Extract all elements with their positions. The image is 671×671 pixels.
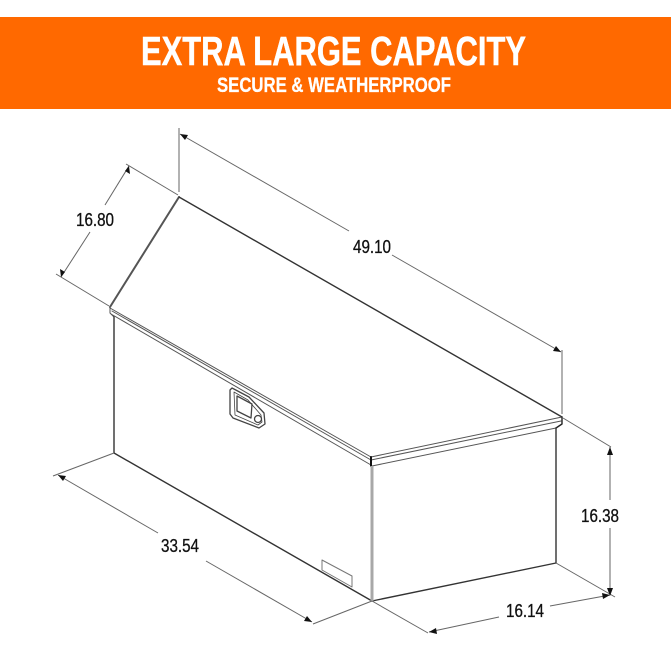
header banner xyxy=(0,17,671,109)
label: 16.38 xyxy=(581,505,619,526)
dimension: 16.38 xyxy=(556,418,619,597)
dimension: 33.54 xyxy=(53,453,372,624)
lid front lip xyxy=(110,307,562,466)
label: 16.80 xyxy=(76,209,114,230)
toolbox line drawing xyxy=(110,197,562,601)
label: 16.14 xyxy=(506,600,544,621)
label: 33.54 xyxy=(161,535,199,556)
arrowheads xyxy=(607,447,613,596)
arrowheads xyxy=(60,166,130,277)
arrowheads xyxy=(180,134,561,352)
dimension: 49.10 xyxy=(179,128,562,414)
dimension: 16.14 xyxy=(372,593,610,634)
subtitle: SECURE & WEATHERPROOF xyxy=(217,74,451,97)
dimension: 16.80 xyxy=(56,164,178,306)
label: 49.10 xyxy=(353,236,391,257)
title: EXTRA LARGE CAPACITY xyxy=(141,28,526,74)
box body xyxy=(114,317,556,601)
icon: latch xyxy=(230,388,265,428)
lid top surface xyxy=(110,197,562,457)
arrowheads xyxy=(429,593,610,634)
arrowheads xyxy=(58,475,312,622)
label plate xyxy=(322,560,352,587)
